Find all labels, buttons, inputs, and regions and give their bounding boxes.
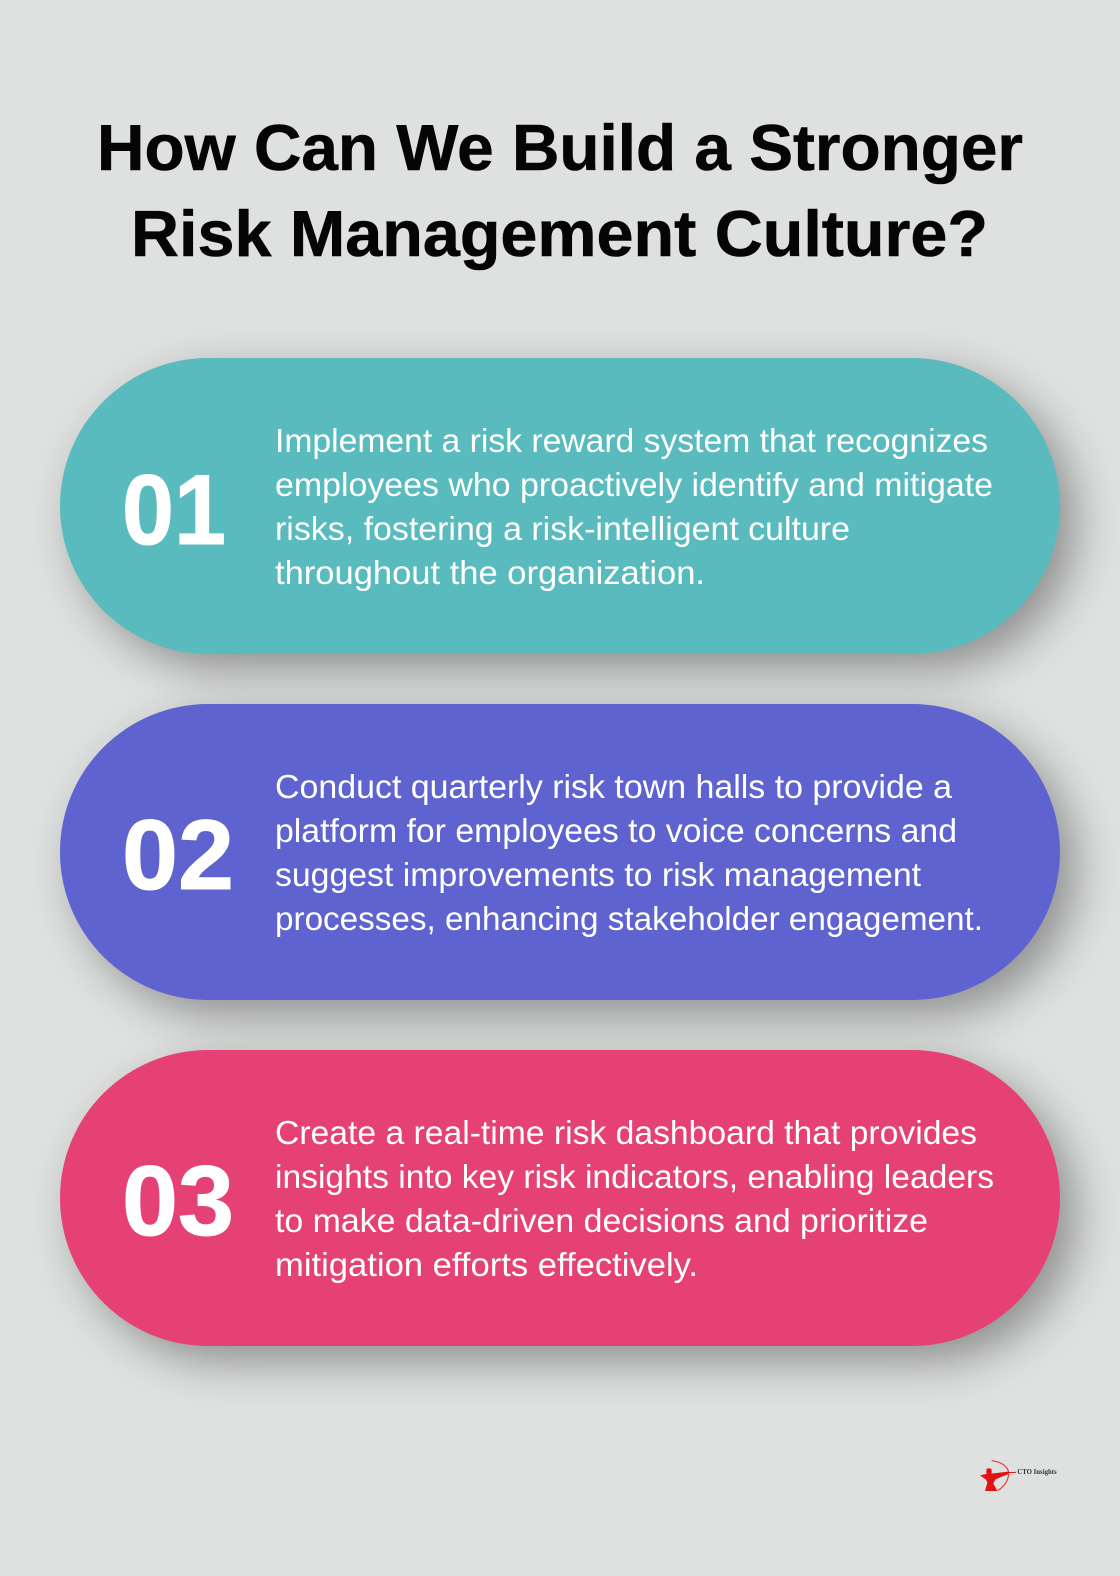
- title: Risk Management Culture?: [131, 197, 988, 270]
- text block: step 02: suggest improvements to risk management: [275, 856, 921, 893]
- text block: step 01: [275, 422, 993, 591]
- number 03: 03: [122, 1145, 234, 1256]
- text block: step 02: Conduct quarterly risk town halls to provide a: [275, 768, 953, 805]
- text block: step 03: to make data-driven decisions and prioritize: [275, 1202, 928, 1239]
- logo: CTO Insights archer: [980, 1460, 1057, 1491]
- panel: step 01: [60, 358, 1060, 654]
- panel: step 03: [60, 1050, 1060, 1346]
- text block: step 01: throughout the organization.: [275, 554, 705, 591]
- text block: step 02: [275, 768, 983, 937]
- title: How Can We Build a Stronger: [97, 111, 1023, 184]
- logo: CTO Insights archer: CTO Insights: [1017, 1468, 1057, 1476]
- text block: step 01: employees who proactively identify and mitigate: [275, 466, 993, 503]
- text block: step 01: Implement a risk reward system that recognizes: [275, 422, 988, 459]
- text block: step 02: platform for employees to voice concerns and: [275, 812, 957, 849]
- number 02: 02: [122, 799, 234, 910]
- text block: step 03: insights into key risk indicators, enabling leaders: [275, 1158, 994, 1195]
- number 01: 01: [122, 454, 226, 565]
- text block: step 01: risks, fostering a risk-intelligent culture: [275, 510, 850, 547]
- text block: step 03: Create a real-time risk dashboard that provides: [275, 1114, 977, 1151]
- text block: step 03: mitigation efforts effectively.: [275, 1246, 698, 1283]
- text block: step 03: [275, 1114, 994, 1283]
- panel: step 02: [60, 704, 1060, 1000]
- title: [97, 111, 1023, 270]
- text block: step 02: processes, enhancing stakeholder engagement.: [275, 900, 983, 937]
